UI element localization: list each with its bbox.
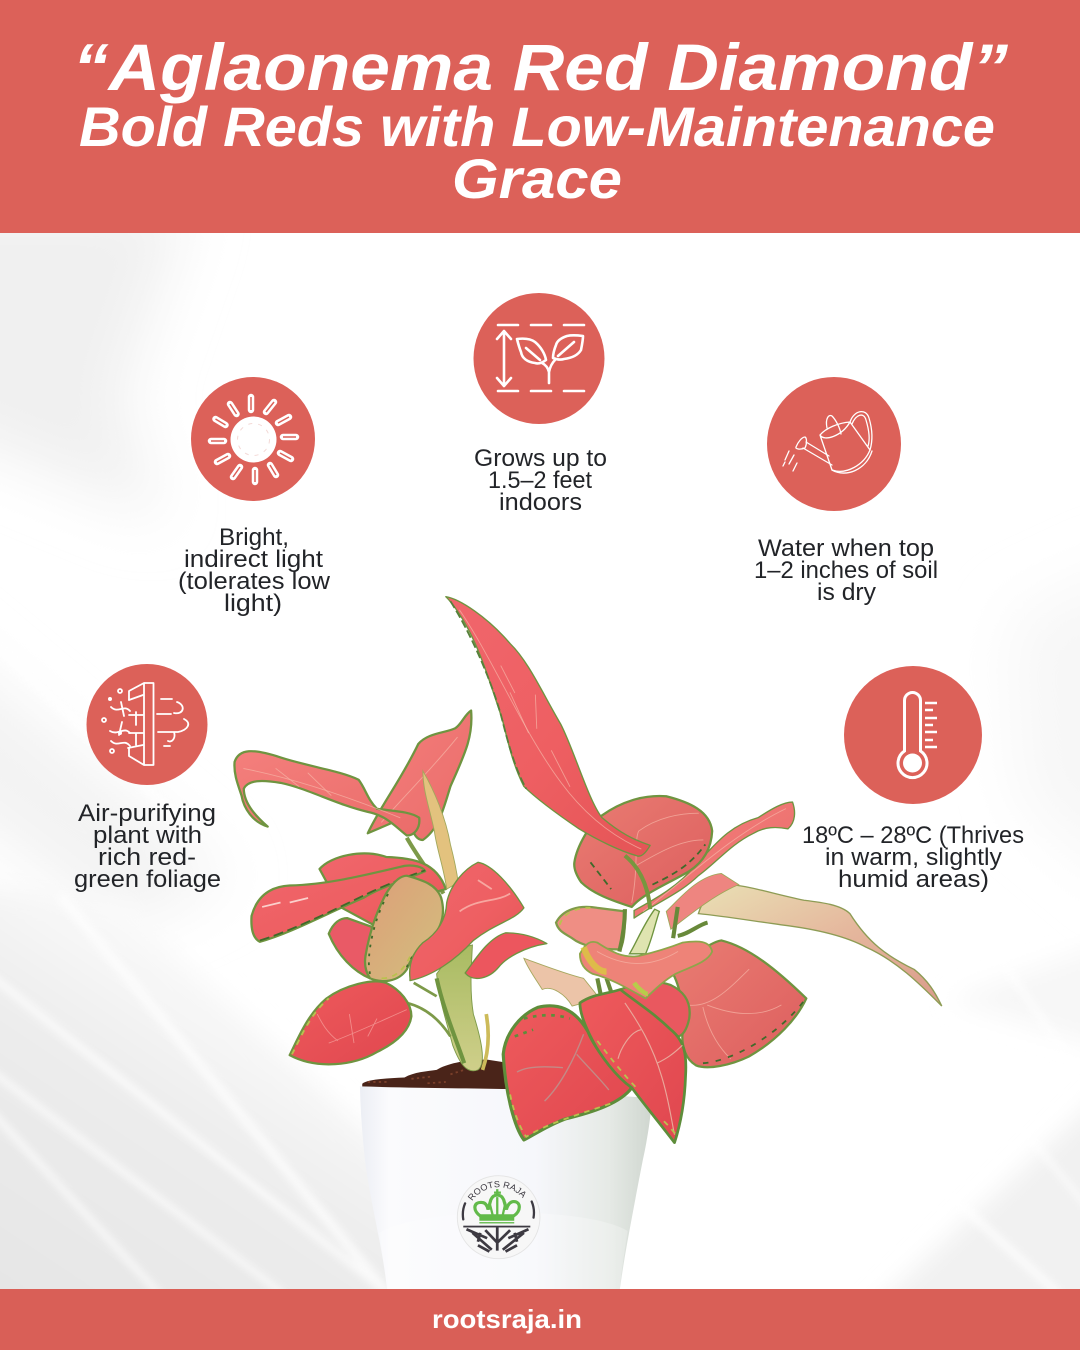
text: water — [754, 535, 938, 606]
text: air: plant with — [93, 822, 202, 849]
text: height: 1.5–2 feet — [488, 467, 592, 494]
leaf: tall upright — [446, 597, 650, 856]
plant photo illustration — [233, 596, 942, 1289]
text: water: Water when top — [758, 535, 934, 562]
title line 3: Grace — [452, 147, 622, 210]
text: air: Air-purifying — [78, 800, 216, 827]
leaf: back left — [329, 918, 372, 978]
pale shoot — [423, 771, 458, 889]
leaf: upper left front — [251, 865, 425, 942]
text: water: is dry — [817, 579, 876, 606]
text: air: green foliage — [74, 866, 221, 893]
icon: watering can — [767, 377, 901, 511]
footer banner — [0, 1289, 1080, 1350]
text: water: 1–2 inches of soil — [754, 557, 938, 584]
leaf: right pointing — [634, 802, 795, 918]
text: light: Bright, — [219, 524, 289, 551]
leaf: lower right arrowhead — [580, 990, 686, 1143]
icon: height and sprout — [474, 293, 604, 424]
text: temperature: humid areas) — [838, 866, 989, 893]
leaf: top left swoop — [234, 751, 419, 836]
leaf: back upper left — [320, 853, 446, 929]
leaf: small pink centre — [580, 941, 712, 998]
title line 1: “Aglaonema Red Diamond” — [73, 30, 1008, 104]
text: temperature: 18ºC – 28ºC (Thrives — [802, 822, 1024, 849]
leaf: large pale right — [698, 885, 942, 1006]
leaf: small pale centre — [524, 958, 600, 1006]
text: air: rich red- — [98, 844, 196, 871]
logo sticker: ROOTS RAJA — [468, 1181, 526, 1200]
title line 2: Bold Reds with Low-Maintenance — [79, 95, 995, 158]
leaf: pink back left — [556, 907, 625, 949]
leaf: upper heart — [574, 796, 712, 907]
header banner — [0, 0, 1080, 233]
text: light: (tolerates low — [178, 568, 331, 595]
leaf: pale green — [365, 876, 443, 981]
leaf: lower centre back — [616, 982, 690, 1036]
leaf: pink back right — [666, 873, 739, 929]
leaf: red centre — [410, 862, 524, 981]
left stems — [407, 838, 488, 1071]
text: light: light) — [224, 590, 282, 617]
leaf: lower left heart — [503, 1006, 632, 1140]
leaf: small red — [465, 933, 547, 978]
leaf: big right lower — [673, 940, 806, 1067]
leaf: top mid — [368, 711, 471, 840]
footer url: rootsraja.in — [432, 1304, 582, 1334]
text: light: indirect light — [184, 546, 323, 573]
pot — [360, 1086, 650, 1289]
icon: thermometer — [844, 666, 982, 804]
soil — [362, 1060, 512, 1092]
leaf: bottom left — [290, 981, 411, 1064]
text: height: Grows up to — [474, 445, 607, 472]
text: height: indoors — [499, 489, 582, 516]
text: temperature — [802, 822, 1024, 893]
icon: air purifier — [86, 664, 208, 785]
icon: sun — [191, 377, 315, 501]
logo sticker — [457, 1175, 540, 1259]
stems right — [597, 856, 708, 1001]
text: height — [474, 445, 607, 516]
text: air — [74, 800, 221, 893]
text: temperature: in warm, slightly — [825, 844, 1002, 871]
text: light — [178, 524, 331, 617]
